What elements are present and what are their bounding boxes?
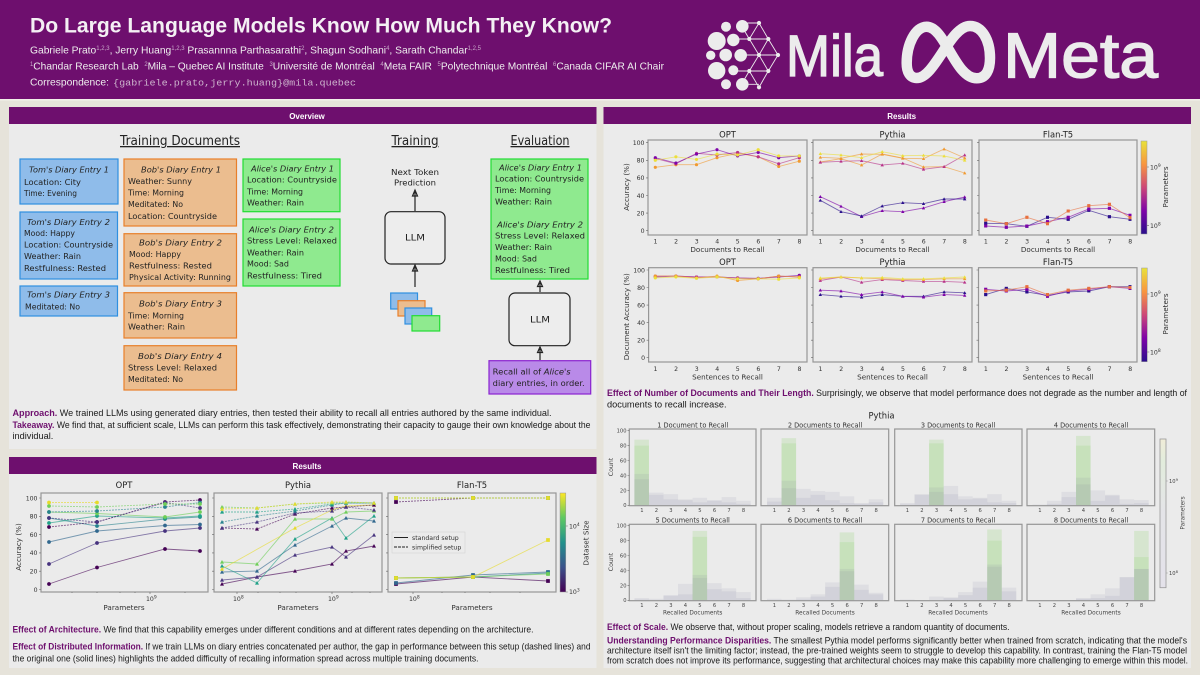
box: LLM evaluation: LLM xyxy=(530,316,550,326)
text: effect of scale and performance disparities xyxy=(607,622,1188,665)
histogram: 5 documents: 100 xyxy=(617,524,626,530)
card: Bob entry 1: Time: Morning xyxy=(127,189,184,198)
title: Do Large Language Models Know How Much They Know? xyxy=(30,13,612,37)
histogram: 6 documents xyxy=(761,516,889,616)
text: effect of architecture and distributed information xyxy=(12,624,590,664)
subplot: OPT documents: 100 xyxy=(633,140,645,147)
card: Tom entry 2: Mood: Happy xyxy=(24,229,75,238)
box: LLM training xyxy=(385,212,445,264)
subplot: Flan-T5 documents xyxy=(977,130,1137,254)
legend: simplified setup xyxy=(412,544,461,552)
histogram: 6 documents: 6 Documents to Recall xyxy=(788,516,862,524)
affiliations: Université de Montréal xyxy=(273,62,380,72)
subplot: OPT sentences: 40 xyxy=(637,320,645,327)
histogram: 5 documents: 0 xyxy=(623,598,626,604)
colorbar: dataset size: 4 xyxy=(577,522,580,528)
histogram: 5 documents: 12345678 xyxy=(640,603,745,609)
subplot: OPT sentences: 100 xyxy=(633,267,645,274)
card: Tom entry 2: Restfulness: Rested xyxy=(24,264,106,273)
affiliations: 5 xyxy=(438,62,442,68)
subplot: OPT documents: Accuracy (%) xyxy=(622,163,631,211)
colorbar: dataset size: 10 xyxy=(569,524,577,530)
card: Alice entry 2: Alice's Diary Entry 2 xyxy=(248,225,334,234)
subplot: Flan-T5 sentences: 12345678 xyxy=(984,366,1132,373)
subplot: OPT documents: OPT xyxy=(719,130,737,140)
subplot: OPT sentences: 20 xyxy=(637,338,645,344)
colorbar: parameters middle: Parameters xyxy=(1161,293,1170,335)
card: Bob entry 3: Weather: Rain xyxy=(128,323,185,332)
card: recalled Alice entries: Restfulness: Tired xyxy=(495,266,570,275)
subplot: OPT sentences: Sentences to Recall xyxy=(692,372,763,382)
histogram: 4 documents: 12345678 xyxy=(1038,508,1143,514)
affiliations: Meta FAIR xyxy=(384,62,438,72)
text: effect of architecture and distributed information: Effect of Distributed Information. If we train LLMs on diary entries concatenated per author, the gap in performance between this setup (dashed lines) and xyxy=(12,642,590,652)
subplot: OPT documents: 12345678 xyxy=(654,238,802,246)
arrow: LLM to recalled entries xyxy=(538,281,542,292)
subplot: OPT documents: Documents to Recall xyxy=(690,245,765,254)
subplot: Flan-T5: 8 xyxy=(417,594,420,600)
subplot: OPT documents: 40 xyxy=(637,193,645,200)
card: recalled Alice entries: Weather: Rain xyxy=(495,243,552,252)
subplot: OPT: 100 xyxy=(26,495,38,502)
subplot: OPT: 80 xyxy=(30,514,38,521)
histogram: 5 documents: 80 xyxy=(620,538,626,544)
card: Alice entry 1: Alice's Diary Entry 1 xyxy=(250,165,334,174)
colorbar: parameters pale: Parameters xyxy=(1180,496,1186,530)
subplot: Flan-T5 xyxy=(386,480,556,612)
card: recalled Alice entries: Mood: Sad xyxy=(495,255,537,264)
card: Tom entry 2: Location: Countryside xyxy=(24,241,113,250)
text: effect of number of documents: Effect of Number of Documents and Their Length. Surprisingly, we observe that model performance does not degrade as the number and length of xyxy=(607,388,1187,398)
box: recall prompt xyxy=(489,361,591,394)
subplot: OPT sentences: 12345678 xyxy=(654,366,802,373)
text: effect of number of documents xyxy=(607,388,1187,410)
histogram: 1 document: 40 xyxy=(620,473,626,479)
card: Bob entry 4: Bob's Diary Entry 4 xyxy=(138,352,222,361)
subplot: OPT: 10 xyxy=(146,596,154,603)
panel: overview xyxy=(9,107,596,449)
subplot: Pythia: 9 xyxy=(336,594,339,600)
authors: 4 xyxy=(386,46,390,52)
card: Tom entry 1 xyxy=(20,159,118,204)
text: effect of number of documents: documents to recall increase. xyxy=(607,400,726,410)
diagram: evaluation xyxy=(489,134,591,394)
text: approach and takeaway: Takeaway. We find that, at sufficient scale, LLMs can perform this task effectively, demonstrating their capacity to gauge their own knowledge about the xyxy=(12,420,591,430)
colorbar: dataset size xyxy=(560,493,590,596)
heading: results: Results xyxy=(293,462,322,471)
legend: standard setup xyxy=(412,535,459,542)
histogram: 7 documents xyxy=(895,516,1022,616)
heading: training documents: Training Documents xyxy=(119,134,240,149)
histogram: 5 documents: 60 xyxy=(620,553,626,559)
authors: 1,2,3 xyxy=(171,46,185,52)
histogram: 1 document: Count xyxy=(608,457,615,476)
affiliations: Mila – Quebec AI Institute xyxy=(148,62,269,72)
histogram: 4 documents: 4 Documents to Recall xyxy=(1054,421,1128,429)
subplot: Pythia xyxy=(212,480,382,612)
card: Bob entry 2: Mood: Happy xyxy=(129,250,181,259)
histogram: 5 documents xyxy=(608,516,756,616)
email addresses: {gabriele.prato,jerry.huang}@mila.quebec xyxy=(113,78,356,89)
subplot: Pythia: Pythia xyxy=(285,480,311,490)
header banner xyxy=(0,0,1200,101)
histogram: 7 documents: 12345678 xyxy=(906,603,1011,609)
card: Bob entry 2: Bob's Diary Entry 2 xyxy=(139,239,222,248)
card: Tom entry 1: Location: City xyxy=(24,178,81,187)
card: Bob entry 4: Meditated: No xyxy=(128,375,183,384)
subplot: Flan-T5 sentences: Flan-T5 xyxy=(1043,257,1073,267)
card: Bob entry 3: Bob's Diary Entry 3 xyxy=(139,300,222,309)
subplot: OPT sentences: 80 xyxy=(637,285,645,292)
colorbar: parameters pale: 8 xyxy=(1176,569,1179,574)
histogram: 1 document xyxy=(608,421,756,514)
subplot: Pythia documents: Documents to Recall xyxy=(855,245,930,254)
histogram: 8 documents: Recalled Documents xyxy=(1061,610,1121,616)
panel: results right xyxy=(604,107,1191,668)
subplot: OPT xyxy=(14,480,208,612)
box: LLM evaluation xyxy=(509,293,570,346)
card: Tom entry 2: Weather: Rain xyxy=(24,252,81,261)
colorbar: parameters top: Parameters xyxy=(1161,166,1170,208)
card: recalled Alice entries: Weather: Rain xyxy=(495,197,552,206)
authors: 1,2,5 xyxy=(468,46,482,52)
card: recalled Alice entries: Alice's Diary Entry 2 xyxy=(496,221,583,230)
logo: Meta: Meta xyxy=(1003,20,1158,92)
box: recall prompt: diary entries, in order. xyxy=(493,379,585,388)
histogram: 1 document: 0 xyxy=(623,503,626,509)
subplot: Pythia documents xyxy=(811,130,972,254)
subplot: Pythia sentences: Pythia xyxy=(879,257,906,267)
histogram: 3 documents: 3 Documents to Recall xyxy=(921,421,995,429)
arrow: LLM to prediction xyxy=(412,190,418,211)
authors: , Sarath Chandar xyxy=(389,45,468,56)
box: recall prompt: Recall all of Alice's xyxy=(493,367,571,376)
card: Alice entry 2: Mood: Sad xyxy=(247,260,289,269)
histogram: 1 document: 80 xyxy=(620,444,626,450)
affiliations: 6 xyxy=(553,62,557,68)
heading: overview: Overview xyxy=(289,112,326,121)
card: Tom entry 3: Tom's Diary Entry 3 xyxy=(27,291,110,300)
subplot: Flan-T5 documents: Documents to Recall xyxy=(1021,245,1095,254)
subplot: OPT sentences: 60 xyxy=(637,302,645,309)
text: approach and takeaway xyxy=(12,408,591,441)
colorbar: parameters pale: 10 xyxy=(1169,479,1176,485)
histogram: 6 documents: 12345678 xyxy=(773,603,878,609)
histogram: 7 documents: Recalled Documents xyxy=(928,610,988,616)
histogram: 5 documents: 40 xyxy=(620,568,626,574)
card: Bob entry 3: Time: Morning xyxy=(127,312,184,321)
card: Bob entry 4: Stress Level: Relaxed xyxy=(128,364,217,373)
colorbar: parameters middle: 9 xyxy=(1158,290,1161,296)
colorbar: dataset size: 10 xyxy=(569,589,577,596)
card: Alice entry 2: Weather: Rain xyxy=(247,248,304,257)
histogram: 8 documents xyxy=(1027,516,1155,616)
subplot: Pythia sentences: 12345678 xyxy=(818,366,967,373)
subplot: OPT: 20 xyxy=(30,568,38,576)
card: recalled Alice entries: Alice's Diary Entry 1 xyxy=(498,163,582,172)
subplot: OPT documents: 60 xyxy=(637,175,645,182)
subplot: OPT sentences: Document Accuracy (%) xyxy=(622,273,631,360)
chart title: Pythia xyxy=(868,410,895,420)
subplot: OPT sentences: 0 xyxy=(641,355,645,362)
logo: Meta xyxy=(907,20,1158,92)
card: Tom entry 1: Time: Evening xyxy=(23,189,77,198)
heading: training: Training xyxy=(391,134,438,149)
authors: , Jerry Huang xyxy=(110,45,172,56)
colorbar: parameters top: 10 xyxy=(1150,164,1158,172)
card: recalled Alice entries: Location: Countryside xyxy=(495,175,584,184)
histogram: 8 documents: 12345678 xyxy=(1038,603,1143,609)
card: Bob entry 1: Bob's Diary Entry 1 xyxy=(141,166,221,175)
subplot: OPT: Parameters xyxy=(103,603,145,612)
histogram: 5 documents: 5 Documents to Recall xyxy=(656,516,730,524)
histogram: 2 documents: 2 Documents to Recall xyxy=(788,421,862,429)
subplot: OPT documents: 80 xyxy=(637,158,645,165)
colorbar: parameters pale xyxy=(1160,439,1186,588)
colorbar: parameters middle: 10 xyxy=(1150,350,1158,356)
histogram: 6 documents: Recalled Documents xyxy=(795,610,855,616)
legend xyxy=(392,532,465,553)
affiliations: 1 xyxy=(30,62,34,68)
card: Bob entry 2 xyxy=(124,234,236,286)
text: effect of scale and performance disparities: Understanding Performance Disparities. The smallest Pythia model performs significantly better when trained from scratch, indicating that the model's xyxy=(607,635,1187,645)
card: recalled Alice entries xyxy=(491,159,588,279)
card: Bob entry 2: Physical Activity: Running xyxy=(129,273,231,282)
histogram: 1 document: 60 xyxy=(620,458,626,464)
logo: Mila xyxy=(706,20,884,91)
colorbar: parameters pale: 9 xyxy=(1176,477,1179,482)
chart: accuracy vs documents to recall xyxy=(622,130,1170,254)
colorbar: parameters middle: 8 xyxy=(1158,348,1161,354)
histogram: 5 documents: 20 xyxy=(620,583,626,589)
histogram: 1 document: 20 xyxy=(620,488,626,494)
authors: , Shagun Sodhani xyxy=(304,45,386,56)
card: Tom entry 2: Tom's Diary Entry 2 xyxy=(27,218,110,227)
card: Tom entry 1: Tom's Diary Entry 1 xyxy=(29,166,109,175)
subplot: Flan-T5 documents: 12345678 xyxy=(984,238,1132,246)
diagram: training documents xyxy=(20,134,340,390)
subplot: Flan-T5: Parameters xyxy=(451,603,493,612)
authors: 2 xyxy=(301,46,305,52)
card: Tom entry 3: Meditated: No xyxy=(25,303,80,312)
subplot: OPT sentences: OPT xyxy=(719,257,737,267)
label: next token prediction xyxy=(391,168,439,188)
icon: stacked documents xyxy=(391,293,440,331)
subplot: Pythia sentences: Sentences to Recall xyxy=(857,372,928,382)
histogram: 1 document: 100 xyxy=(617,429,626,435)
colorbar: parameters middle xyxy=(1142,268,1170,362)
subplot: OPT: OPT xyxy=(116,480,133,490)
card: Alice entry 2 xyxy=(243,219,340,286)
subplot: OPT: 0 xyxy=(34,587,38,594)
text: approach and takeaway: Approach. We trained LLMs using generated diary entries, then tested their ability to recall all entries authored by the same individual. xyxy=(12,408,552,418)
histogram: 8 documents: 8 Documents to Recall xyxy=(1054,516,1128,524)
affiliations: Polytechnique Montréal xyxy=(441,62,553,72)
subplot: OPT: 60 xyxy=(30,532,38,539)
card: Bob entry 2: Restfulness: Rested xyxy=(129,262,212,271)
card: Alice entry 1: Time: Morning xyxy=(246,187,303,196)
histogram: 2 documents xyxy=(761,421,889,514)
subplot: Pythia: Parameters xyxy=(277,603,319,612)
card: Alice entry 1 xyxy=(243,159,340,212)
label: next token prediction: Next Token xyxy=(391,168,439,177)
heading: results: Results xyxy=(887,112,917,121)
text: effect of architecture and distributed information: Effect of Architecture. We find that this capability emerges under different conditions and at different rates depending on the architecture. xyxy=(12,624,534,634)
card: Bob entry 1 xyxy=(124,159,236,226)
colorbar: parameters pale: 10 xyxy=(1169,571,1176,577)
subplot: Flan-T5 sentences: Sentences to Recall xyxy=(1023,372,1093,382)
histogram: 4 documents xyxy=(1027,421,1155,514)
subplot: Flan-T5 documents: Flan-T5 xyxy=(1043,130,1073,140)
subplot: OPT sentences xyxy=(622,257,807,382)
subplot: OPT: 40 xyxy=(30,550,38,557)
authors: Gabriele Prato xyxy=(30,45,96,56)
arrow: documents to LLM xyxy=(412,265,418,287)
histogram: 5 documents: Recalled Documents xyxy=(663,610,722,616)
colorbar: parameters top: 10 xyxy=(1150,223,1158,230)
chart: accuracy vs parameters by architecture xyxy=(14,480,590,612)
histogram: 1 document: 1 Document to Recall xyxy=(657,421,728,429)
subplot: Pythia: 10 xyxy=(233,596,241,603)
card: Alice entry 1: Weather: Rain xyxy=(247,198,304,207)
colorbar: dataset size: 3 xyxy=(577,588,580,594)
colorbar: parameters top xyxy=(1141,141,1170,234)
authors: 1,2,3 xyxy=(96,46,110,52)
histogram: 7 documents: 7 Documents to Recall xyxy=(921,516,995,524)
histogram: 1 document: 12345678 xyxy=(640,508,745,514)
histogram: 5 documents: Count xyxy=(608,552,615,571)
colorbar: parameters top: 8 xyxy=(1158,222,1161,228)
subplot: OPT documents xyxy=(622,130,807,254)
card: Tom entry 2 xyxy=(20,212,118,279)
text: effect of scale and performance disparities: Effect of Scale. We observe that, without proper scaling, models retrieve a random quantity of documents. xyxy=(607,622,1010,632)
card: Alice entry 1: Location: Countryside xyxy=(247,175,337,184)
text: approach and takeaway: individual. xyxy=(12,431,53,441)
card: Bob entry 4 xyxy=(124,346,236,390)
histogram: 3 documents xyxy=(895,421,1022,514)
colorbar: dataset size: Dataset Size xyxy=(582,520,590,566)
card: Bob entry 1: Location: Countryside xyxy=(128,212,217,221)
card: Bob entry 1: Weather: Sunny xyxy=(128,177,192,186)
subplot: Pythia sentences xyxy=(811,257,972,382)
subplot: Flan-T5 sentences xyxy=(976,257,1137,382)
subplot: OPT documents: 20 xyxy=(637,210,645,217)
correspondence: Correspondence: xyxy=(30,78,109,89)
card: Bob entry 3 xyxy=(124,293,236,338)
text: effect of architecture and distributed information: the original one (solid lines) highlights the added difficulty of recalling information spread across multiple training documents. xyxy=(12,654,478,664)
heading: evaluation: Evaluation xyxy=(510,134,570,149)
subplot: Pythia documents: Pythia xyxy=(879,130,906,140)
box: LLM training: LLM xyxy=(405,234,425,244)
affiliations: Chandar Research Lab xyxy=(33,62,144,72)
card: recalled Alice entries: Time: Morning xyxy=(494,186,551,195)
affiliations: 2 xyxy=(144,62,148,68)
card: Bob entry 1: Meditated: No xyxy=(128,200,183,209)
logo: Mila: Mila xyxy=(786,24,884,89)
chart: Pythia recalled documents histograms xyxy=(608,410,1186,616)
subplot: Pythia: 10 xyxy=(328,596,336,603)
arrow: prompt to LLM xyxy=(538,347,542,360)
histogram: 2 documents: 12345678 xyxy=(773,508,878,514)
subplot: Pythia: 8 xyxy=(241,594,244,600)
subplot: Flan-T5: 10 xyxy=(409,596,417,603)
subplot: Pythia documents: 12345678 xyxy=(818,238,967,246)
subplot: OPT: 9 xyxy=(154,594,157,600)
subplot: Flan-T5: Flan-T5 xyxy=(457,480,487,490)
affiliations: 3 xyxy=(269,62,273,68)
colorbar: parameters top: 9 xyxy=(1158,163,1161,169)
card: Alice entry 2: Restfulness: Tired xyxy=(247,271,322,280)
affiliations: 4 xyxy=(380,62,384,68)
chart: document accuracy vs sentences to recall xyxy=(622,257,1170,382)
subplot: OPT documents: 0 xyxy=(641,228,645,235)
histogram: 3 documents: 12345678 xyxy=(906,508,1011,514)
label: next token prediction: Prediction xyxy=(394,179,436,188)
affiliations: Canada CIFAR AI Chair xyxy=(556,62,665,72)
colorbar: parameters middle: 10 xyxy=(1150,292,1158,298)
card: recalled Alice entries: Stress Level: Relaxed xyxy=(495,232,585,241)
subplot: OPT: Accuracy (%) xyxy=(14,523,23,571)
card: Tom entry 3 xyxy=(20,286,118,316)
panel: results left xyxy=(9,457,596,668)
card: Alice entry 2: Stress Level: Relaxed xyxy=(247,237,337,246)
authors: Prasannna Parthasarathi xyxy=(185,45,301,56)
diagram: training xyxy=(385,134,445,331)
